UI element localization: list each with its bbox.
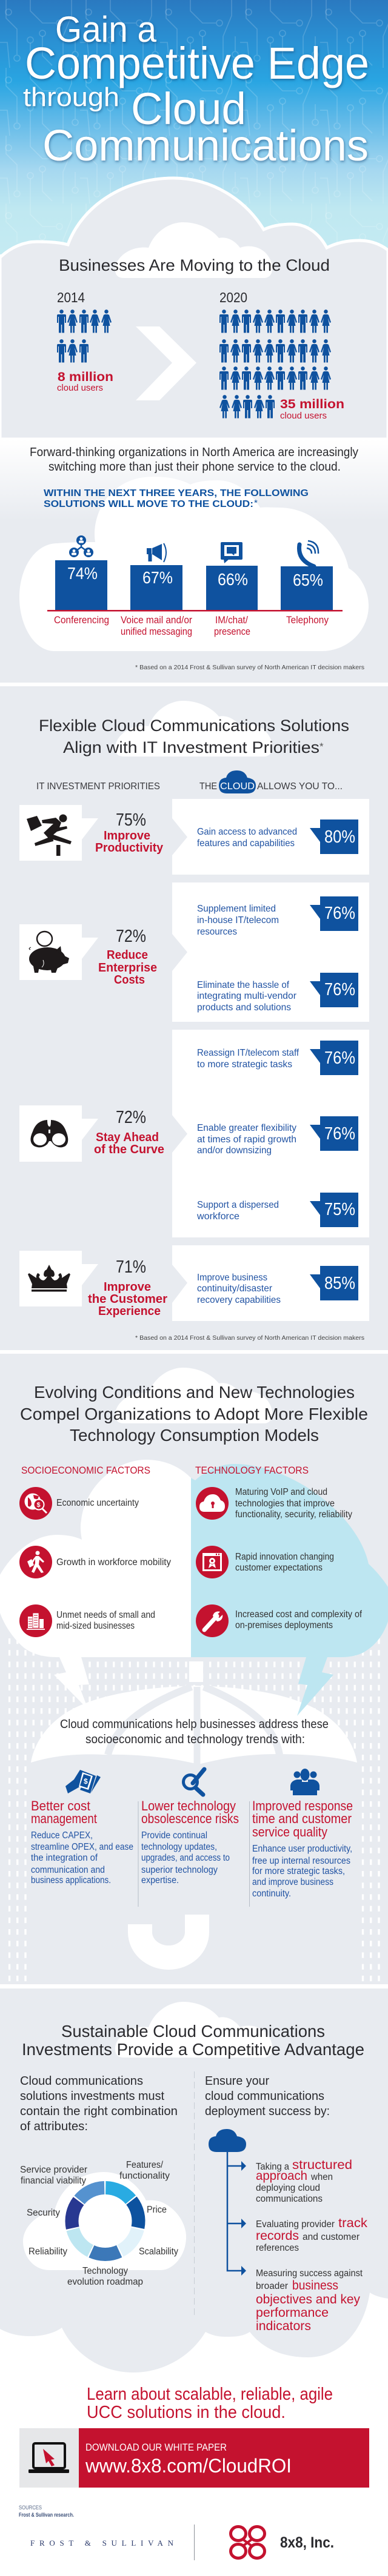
label: features bbox=[119, 2160, 170, 2181]
icon: wrench and magnifier bbox=[183, 1769, 204, 1795]
column: lower obsolescence risks: obsolescence risks bbox=[141, 1811, 239, 1826]
subheading: WITHIN THE NEXT THREE YEARS, THE FOLLOWING bbox=[44, 488, 309, 498]
item: dispersed workforce 75 percent: Support a dispersed bbox=[197, 1200, 279, 1210]
item: reassign staff 76 percent: Reassign IT/telecom staff bbox=[197, 1048, 299, 1058]
sources bbox=[19, 2505, 74, 2518]
row 4 priority: improve customer experience bbox=[19, 1251, 167, 1318]
bar: conferencing bbox=[55, 560, 107, 610]
call to action heading bbox=[87, 2385, 333, 2422]
small white cloud behind heading bbox=[115, 2002, 272, 2058]
text: Unmet needs of small and bbox=[56, 1610, 155, 1620]
icon card: crown bbox=[19, 1251, 98, 1306]
sources: SOURCES bbox=[19, 2505, 42, 2511]
stat: 35 million: 35 million bbox=[280, 397, 344, 411]
item: gain access 80 percent: 80% bbox=[324, 827, 355, 847]
small white cloud behind heading bbox=[115, 222, 272, 278]
panel: IT investment priorities bbox=[0, 686, 388, 1350]
column: better cost management: Better cost bbox=[31, 1798, 90, 1813]
item: gain access 80 percent: Gain access to advanced bbox=[197, 827, 297, 837]
row 3 cloud benefits bbox=[172, 1030, 369, 1237]
column heading: priorities: IT INVESTMENT PRIORITIES bbox=[36, 781, 160, 792]
intro text: switching more than just their phone service to the cloud. bbox=[48, 460, 341, 474]
logo: Frost & Sullivan: FROST & SULLIVAN bbox=[30, 2538, 174, 2548]
left paragraph: Cloud communications bbox=[20, 2074, 143, 2088]
header cloud shape bbox=[0, 178, 388, 439]
label: IM/chat: presence bbox=[214, 626, 250, 637]
timeline line bbox=[227, 2152, 241, 2271]
factor: workforce mobility bbox=[19, 1546, 171, 1578]
bar: telephony: 65% bbox=[293, 571, 323, 589]
year 2014: 2014 bbox=[57, 290, 85, 305]
column: lower obsolescence risks: upgrades, and access to bbox=[141, 1853, 230, 1863]
donut segments bbox=[58, 2174, 152, 2268]
label: security: Security bbox=[27, 2208, 60, 2218]
column: better cost management: communication and bbox=[31, 1865, 105, 1875]
heading: Evolving Conditions and New Technologies bbox=[34, 1383, 355, 1402]
right paragraph bbox=[205, 2074, 330, 2118]
icon: globe and magnifier: $ bbox=[36, 1502, 41, 1509]
icon card: binoculars bbox=[19, 1105, 98, 1162]
umbrella handle bbox=[128, 1915, 209, 1970]
column: improved response bbox=[252, 1798, 353, 1899]
factor: unmet needs bbox=[19, 1604, 155, 1637]
bar chart bbox=[47, 560, 343, 637]
bar: telephony bbox=[281, 566, 333, 610]
column: better cost management bbox=[31, 1798, 133, 1886]
icon: blue cloud bbox=[209, 2129, 246, 2152]
icon: megaphone bbox=[147, 543, 166, 562]
text: 75 percent improve productivity: Improve bbox=[104, 829, 150, 843]
column heading: the cloud allows you to bbox=[199, 770, 343, 793]
column: improved response: time and customer bbox=[252, 1811, 352, 1826]
label: reliability: Reliability bbox=[28, 2247, 67, 2257]
icon card: pig bbox=[19, 924, 98, 980]
row 2 priority: reduce enterprise costs bbox=[19, 924, 157, 987]
text: Rapid innovation changing bbox=[235, 1552, 334, 1562]
item: eliminate hassle 76 percent: products and solutions bbox=[197, 1002, 291, 1013]
text: Growth in workforce mobility bbox=[56, 1557, 171, 1568]
right paragraph: deployment success by: bbox=[205, 2104, 330, 2118]
right paragraph: Ensure your bbox=[205, 2074, 269, 2088]
heading: Sustainable Cloud Communications bbox=[61, 2022, 325, 2041]
arrow 2 bbox=[241, 2219, 246, 2228]
left paragraph bbox=[20, 2074, 178, 2133]
stat: 8 million: 8 million bbox=[58, 370, 113, 384]
icon: piggy bank bbox=[29, 932, 69, 973]
text: Increased cost and complexity of bbox=[235, 1609, 363, 1620]
step 1 text: approach bbox=[256, 2169, 307, 2183]
item: supplement limited 76 percent: 76% bbox=[324, 904, 355, 923]
step 3 text: objectives and key bbox=[256, 2293, 360, 2306]
left paragraph: solutions investments must bbox=[20, 2089, 164, 2103]
item: dispersed workforce 75 percent bbox=[196, 1193, 358, 1227]
column: improved response: for more strategic tasks, bbox=[252, 1866, 345, 1876]
step 3 text: indicators bbox=[256, 2319, 311, 2333]
umbrella text bbox=[60, 1718, 329, 1746]
item: supplement limited 76 percent: resources bbox=[197, 927, 237, 937]
fade bbox=[0, 439, 388, 521]
bar: conferencing: 74% bbox=[67, 564, 98, 583]
step 3 text: business bbox=[292, 2279, 338, 2293]
icon: binoculars bbox=[30, 1120, 68, 1147]
text: 71 percent improve customer experience: Improve bbox=[104, 1280, 151, 1294]
column: lower obsolescence risks: superior technology bbox=[141, 1865, 218, 1875]
step 1 text: deploying cloud bbox=[256, 2183, 320, 2193]
column: lower obsolescence risks: Provide continual bbox=[141, 1830, 207, 1841]
heading: * bbox=[319, 741, 324, 752]
text: 72 percent stay ahead: 72% bbox=[116, 1108, 146, 1127]
item: eliminate hassle 76 percent bbox=[197, 973, 358, 1013]
label: telephony: Telephony bbox=[286, 614, 329, 626]
icon: conferencing bbox=[69, 535, 93, 557]
step 1 text: communications bbox=[256, 2194, 323, 2204]
text: 75 percent improve productivity: Productivity bbox=[95, 841, 164, 855]
panel background with scalloped cloud bottom bbox=[0, 1988, 388, 2372]
title: Competitive Edge bbox=[25, 38, 369, 88]
factor: maturing VoIP bbox=[196, 1487, 352, 1520]
stat: 35 million: cloud users bbox=[280, 411, 327, 421]
label: service provider bbox=[20, 2165, 87, 2186]
text: technologies that improve bbox=[235, 1498, 335, 1509]
umbrella ribs bbox=[108, 1687, 279, 1764]
heading bbox=[20, 1383, 368, 1445]
card bbox=[172, 1245, 369, 1321]
stat: 8 million: cloud users bbox=[57, 383, 103, 393]
column: better cost management: management bbox=[31, 1811, 97, 1826]
panel: sustainable investments bbox=[0, 1988, 388, 2372]
text: on-premises deployments bbox=[235, 1620, 333, 1631]
text: 71 percent improve customer experience: the Customer bbox=[88, 1293, 167, 1306]
text: 75 percent improve productivity: 75% bbox=[116, 810, 146, 830]
red banner bbox=[79, 2428, 369, 2488]
card bbox=[172, 1030, 369, 1237]
panel: businesses moving to the cloud bbox=[0, 178, 388, 439]
icon: office buildings bbox=[19, 1604, 52, 1637]
heading: Investments Provide a Competitive Advantage bbox=[22, 2040, 364, 2059]
stat: 8 million bbox=[57, 370, 113, 393]
step 2 text: and customer bbox=[303, 2232, 360, 2242]
item: eliminate hassle 76 percent: 76% bbox=[324, 980, 355, 999]
bar: IM/chat: 66% bbox=[218, 570, 248, 589]
big cloud: right half bbox=[191, 1464, 388, 1657]
step 3 text: broader bbox=[256, 2281, 288, 2291]
footnote: * Based on a 2014 Frost & Sullivan survey of North American IT decision makers bbox=[135, 664, 364, 671]
item: eliminate hassle 76 percent: Eliminate the hassle of bbox=[197, 980, 290, 990]
panel: solutions moving to the cloud bbox=[0, 439, 388, 683]
icon: crown bbox=[28, 1265, 70, 1291]
factor: increased cost bbox=[196, 1604, 363, 1637]
icon: telephone bbox=[299, 541, 318, 566]
arrow 3 bbox=[241, 2266, 246, 2276]
subheading: * bbox=[254, 498, 258, 508]
icon: hurdler bbox=[27, 814, 72, 856]
large white cloud bbox=[19, 477, 369, 651]
label: voice mail: unified messaging bbox=[121, 626, 192, 637]
column: improved response: Enhance user productivity, bbox=[252, 1844, 352, 1854]
title bbox=[23, 9, 369, 170]
arrow 1 bbox=[241, 2161, 246, 2171]
panel background bbox=[0, 1354, 388, 1984]
bar: voice mail bbox=[130, 565, 182, 610]
column: improved response: service quality bbox=[252, 1824, 327, 1839]
panel: sky header background bbox=[0, 0, 388, 254]
icon: globe and magnifier bbox=[19, 1487, 52, 1520]
bar: IM/chat bbox=[206, 566, 258, 610]
umbrella bbox=[31, 1661, 357, 1970]
label: features: functionality bbox=[119, 2171, 170, 2181]
column: better cost management: Reduce CAPEX, bbox=[31, 1830, 93, 1841]
step 2 text: records bbox=[256, 2229, 299, 2243]
label: voice mail: Voice mail and/or bbox=[121, 614, 192, 626]
text bbox=[235, 1609, 363, 1631]
icon: wrench bbox=[196, 1604, 229, 1637]
column heading: the cloud allows you to: ALLOWS YOU TO... bbox=[257, 781, 343, 792]
heading bbox=[22, 2022, 364, 2059]
circuit pattern overlay bbox=[0, 0, 388, 242]
item: gain access 80 percent bbox=[197, 819, 358, 854]
item: business continuity 85 percent: 85% bbox=[324, 1274, 355, 1293]
label: features: Features/ bbox=[126, 2160, 164, 2170]
icon: chat bubble bbox=[221, 542, 242, 563]
label: service provider: financial viability bbox=[21, 2176, 86, 2186]
heading: Technology Consumption Models bbox=[70, 1426, 319, 1445]
small white cloud behind heading bbox=[115, 701, 272, 757]
icon: window with award bbox=[196, 1546, 229, 1578]
column: better cost management: streamline OPEX, and ease bbox=[31, 1842, 133, 1852]
card bbox=[172, 799, 369, 875]
row 1 cloud benefits bbox=[172, 799, 369, 875]
title: Cloud bbox=[131, 84, 246, 134]
item: gain access 80 percent: features and capabilities bbox=[197, 838, 295, 849]
column heading: the cloud allows you to: CLOUD bbox=[220, 781, 255, 792]
text: Maturing VoIP and cloud bbox=[235, 1487, 327, 1497]
item: dispersed workforce 75 percent: workforce bbox=[196, 1211, 239, 1222]
step 1 text: when bbox=[310, 2172, 333, 2182]
umbrella stem top bbox=[189, 1661, 203, 1682]
step 3 text bbox=[256, 2268, 363, 2333]
step 2 text: references bbox=[256, 2243, 299, 2253]
item: dispersed workforce 75 percent: 75% bbox=[324, 1200, 355, 1219]
icon: walking commuter bbox=[19, 1546, 52, 1578]
column heading: technology factors: TECHNOLOGY FACTORS bbox=[195, 1465, 309, 1476]
item: business continuity 85 percent: Improve business bbox=[197, 1273, 267, 1283]
step 3 text: Measuring success against bbox=[256, 2268, 363, 2279]
call to action heading: UCC solutions in the cloud. bbox=[87, 2403, 286, 2422]
column: lower obsolescence risks: Lower technology bbox=[141, 1798, 236, 1813]
row 4 cloud benefits bbox=[172, 1245, 369, 1321]
label: IM/chat bbox=[214, 614, 250, 637]
column: improved response: Improved response bbox=[252, 1798, 353, 1813]
column: lower obsolescence risks: expertise. bbox=[141, 1875, 179, 1886]
label: technology roadmap: evolution roadmap bbox=[67, 2277, 143, 2287]
item: enable flexibility 76 percent: Enable greater flexibility bbox=[197, 1123, 296, 1133]
row 1 priority: improve productivity bbox=[19, 805, 164, 861]
banner text: DOWNLOAD OUR WHITE PAPER bbox=[85, 2442, 227, 2453]
umbrella text: Cloud communications help businesses address these bbox=[60, 1718, 329, 1731]
stat: 35 million bbox=[280, 397, 344, 421]
lightning bolt: right bbox=[297, 1657, 333, 1716]
icon card: hurdler bbox=[19, 805, 98, 861]
heading: Align with IT Investment Priorities bbox=[63, 738, 319, 757]
icon: laptop with cursor bbox=[28, 2443, 69, 2473]
panel background bbox=[0, 686, 388, 1350]
title: Gain a bbox=[55, 9, 157, 50]
text: 72 percent reduce enterprise costs bbox=[98, 927, 157, 987]
year 2020: 2020 bbox=[219, 290, 247, 305]
item: supplement limited 76 percent: Supplement limited bbox=[197, 904, 276, 914]
white cloud behind donut bbox=[23, 2172, 186, 2270]
label: technology roadmap: Technology bbox=[82, 2266, 128, 2276]
donut chart bbox=[20, 2160, 186, 2287]
item: business continuity 85 percent: recovery capabilities bbox=[197, 1295, 281, 1305]
item: reassign staff 76 percent: 76% bbox=[324, 1048, 355, 1068]
umbrella text: socioeconomic and technology trends with: bbox=[85, 1733, 305, 1746]
item: enable flexibility 76 percent: at times of rapid growth bbox=[197, 1134, 296, 1145]
logo: 8x8 mark bbox=[230, 2527, 264, 2558]
column heading: the cloud allows you to: THE bbox=[199, 781, 217, 792]
text: functionality, security, reliability bbox=[235, 1509, 352, 1520]
label: IM/chat: IM/chat/ bbox=[215, 614, 248, 626]
icon: cash in hand bbox=[65, 1770, 101, 1793]
column: lower obsolescence risks: technology updates, bbox=[141, 1842, 217, 1852]
column: better cost management: the integration of bbox=[31, 1853, 98, 1863]
text: 72 percent reduce enterprise costs: 72% bbox=[116, 927, 146, 946]
text: 72 percent reduce enterprise costs: Reduce bbox=[107, 949, 148, 962]
factor: rapid innovation bbox=[196, 1546, 334, 1578]
text: 72 percent stay ahead bbox=[94, 1108, 164, 1156]
text: 72 percent stay ahead: of the Curve bbox=[94, 1143, 164, 1156]
bar: voice mail: 67% bbox=[142, 568, 173, 587]
column: lower obsolescence risks bbox=[141, 1798, 239, 1886]
item: business continuity 85 percent bbox=[197, 1266, 358, 1305]
arrow: chevron bbox=[136, 326, 196, 400]
card bbox=[172, 882, 369, 1022]
text: 72 percent stay ahead: Stay Ahead bbox=[96, 1131, 159, 1144]
title: through bbox=[23, 82, 119, 112]
column heading: socioeconomic factors: SOCIOECONOMIC FACTORS bbox=[21, 1465, 150, 1476]
step 1 text: structured bbox=[292, 2158, 352, 2172]
text bbox=[235, 1552, 334, 1573]
big cloud: left half bbox=[0, 1460, 191, 1657]
lightning bolt: left bbox=[54, 1657, 89, 1706]
factor: economic uncertainty bbox=[19, 1487, 139, 1520]
sources: Frost & Sullivan research. bbox=[19, 2512, 74, 2518]
heading: businesses moving: Businesses Are Moving to the Cloud bbox=[59, 256, 330, 274]
item: enable flexibility 76 percent: and/or downsizing bbox=[197, 1145, 272, 1156]
step 1 text: Taking a bbox=[256, 2162, 289, 2172]
left paragraph: contain the right combination bbox=[20, 2104, 178, 2118]
item: reassign staff 76 percent bbox=[197, 1041, 358, 1075]
text: 71 percent improve customer experience: 71% bbox=[116, 1257, 146, 1277]
text: 71 percent improve customer experience bbox=[88, 1257, 167, 1318]
people 2020 bbox=[219, 310, 331, 418]
call to action heading: Learn about scalable, reliable, agile bbox=[87, 2385, 333, 2404]
label: technology roadmap bbox=[67, 2266, 143, 2287]
intro text: Forward-thinking organizations in North America are increasingly bbox=[30, 446, 358, 459]
text: customer expectations bbox=[235, 1563, 323, 1573]
row 2 cloud benefits bbox=[172, 882, 369, 1022]
download banner bbox=[19, 2428, 369, 2488]
right paragraph: cloud communications bbox=[205, 2089, 324, 2103]
people 2014 bbox=[57, 310, 112, 362]
row 3 priority: stay ahead of the curve bbox=[19, 1105, 164, 1162]
deployment timeline bbox=[209, 2129, 368, 2333]
heading: Compel Organizations to Adopt More Flexible bbox=[20, 1405, 368, 1423]
left paragraph: of attributes: bbox=[20, 2119, 88, 2133]
step 2 text: Evaluating provider bbox=[256, 2219, 335, 2230]
text: Economic uncertainty bbox=[56, 1498, 139, 1508]
text: 75 percent improve productivity bbox=[95, 810, 164, 855]
item: enable flexibility 76 percent: 76% bbox=[324, 1124, 355, 1144]
small white cloud behind heading bbox=[115, 1368, 272, 1423]
footnote: * Based on a 2014 Frost & Sullivan survey of North American IT decision makers bbox=[135, 1334, 364, 1342]
label: voice mail bbox=[121, 614, 192, 637]
icon: group of people bbox=[290, 1769, 319, 1795]
label: conferencing: Conferencing bbox=[54, 614, 109, 626]
item: supplement limited 76 percent: in-house IT/telecom bbox=[197, 915, 279, 925]
heading bbox=[39, 717, 349, 757]
step 1 text bbox=[256, 2158, 352, 2204]
label: service provider: Service provider bbox=[20, 2165, 87, 2175]
item: reassign staff 76 percent: to more strategic tasks bbox=[197, 1059, 292, 1070]
text bbox=[56, 1610, 155, 1631]
step 2 text: track bbox=[338, 2216, 368, 2230]
label: price: Price bbox=[147, 2205, 167, 2215]
icon: cash in hand: $ bbox=[84, 1777, 88, 1786]
umbrella canopy bbox=[31, 1686, 357, 1764]
step 3 text: performance bbox=[256, 2306, 329, 2320]
panel background bbox=[0, 439, 388, 683]
text bbox=[235, 1487, 352, 1520]
icon tile bbox=[19, 2428, 79, 2488]
title: Communications bbox=[42, 122, 369, 170]
item: enable flexibility 76 percent bbox=[197, 1116, 358, 1156]
subheading: SOLUTIONS WILL MOVE TO THE CLOUD: bbox=[44, 499, 253, 509]
baseline bbox=[47, 610, 343, 612]
icon: cloud with keyhole bbox=[196, 1487, 229, 1520]
item: business continuity 85 percent: continuity/disaster bbox=[197, 1283, 273, 1294]
label: scalability: Scalability bbox=[139, 2247, 178, 2257]
text: 72 percent reduce enterprise costs: Costs bbox=[114, 973, 145, 987]
text: 72 percent reduce enterprise costs: Enterprise bbox=[98, 961, 157, 975]
heading: Flexible Cloud Communications Solutions bbox=[39, 717, 349, 735]
panel: evolving conditions and new technologies bbox=[0, 1354, 388, 1984]
step 2 text bbox=[256, 2216, 368, 2253]
intro text bbox=[30, 446, 358, 474]
item: eliminate hassle 76 percent: integrating multi-vendor bbox=[197, 991, 297, 1001]
column: improved response: and improve business bbox=[252, 1877, 333, 1887]
text: 71 percent improve customer experience: Experience bbox=[98, 1305, 161, 1318]
rain dashes bbox=[8, 1638, 381, 1982]
logo: 8x8 wordmark: 8x8, Inc. bbox=[280, 2534, 334, 2551]
subheading bbox=[44, 488, 309, 509]
item: supplement limited 76 percent bbox=[197, 896, 358, 937]
column: improved response: free up internal resources bbox=[252, 1856, 350, 1866]
text: mid-sized businesses bbox=[56, 1621, 135, 1631]
column: improved response: continuity. bbox=[252, 1889, 291, 1899]
column: better cost management: business applications. bbox=[31, 1875, 111, 1886]
banner url: www.8x8.com/CloudROI bbox=[85, 2455, 292, 2477]
